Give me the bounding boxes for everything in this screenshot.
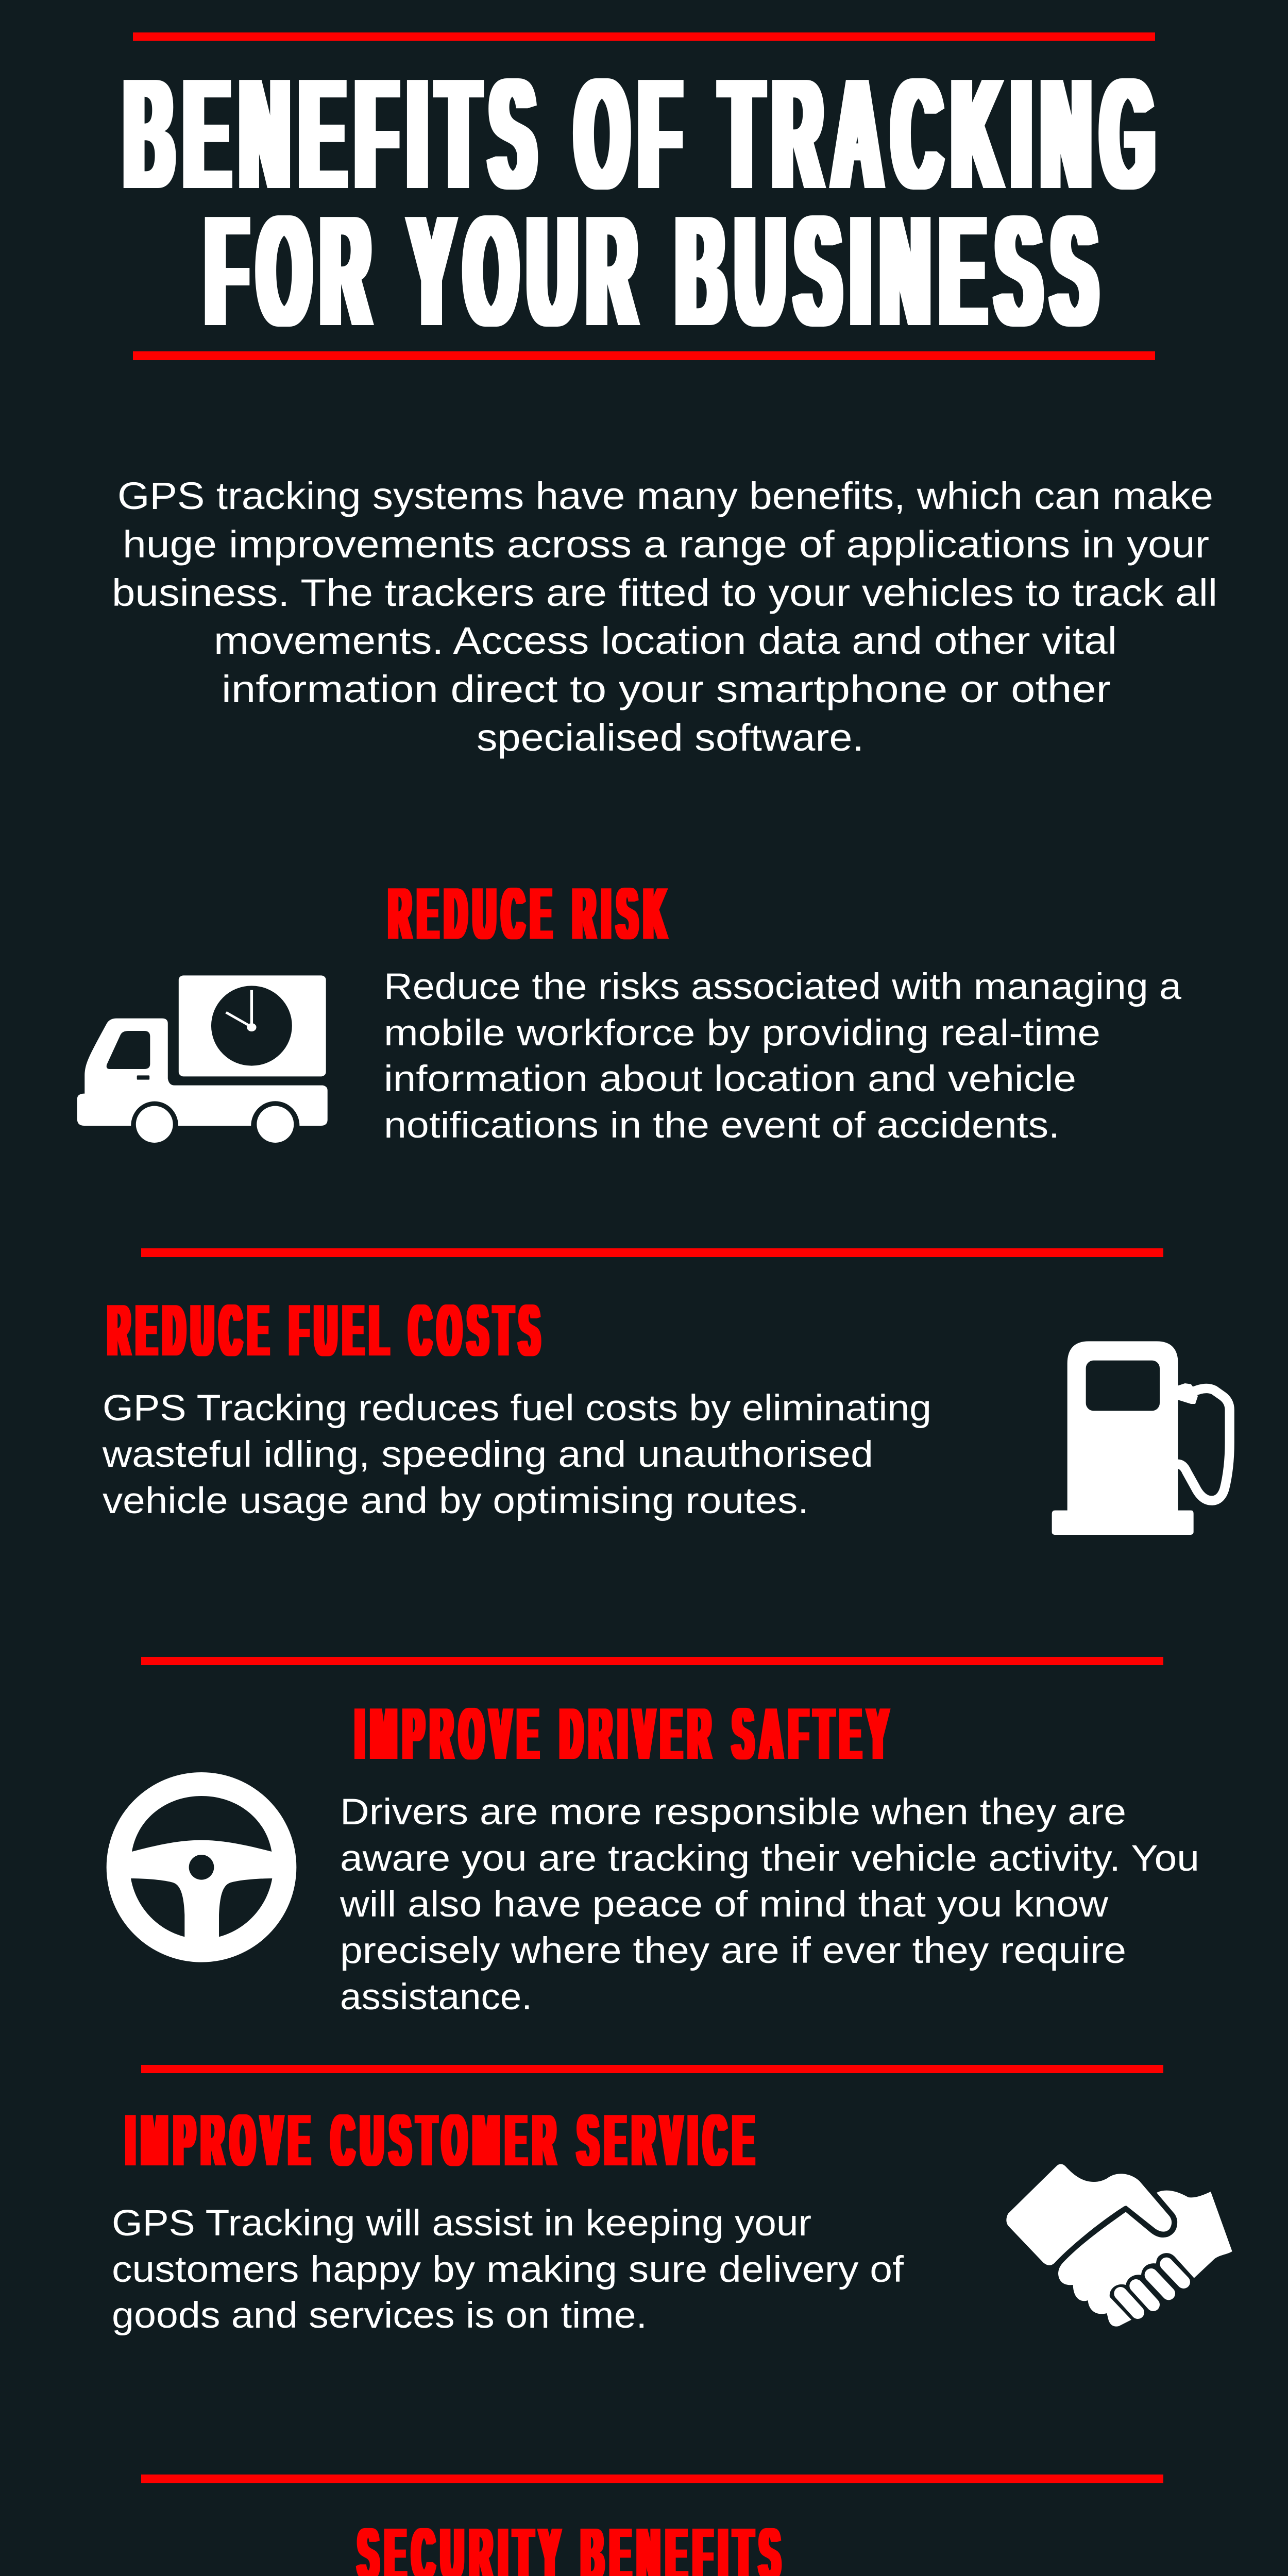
icon: steering wheel — [107, 1772, 296, 1962]
intro paragraph: huge improvements across a range of applications in your — [123, 523, 1209, 566]
body text: improve driver saftey: aware you are tracking their vehicle activity. You — [340, 1838, 1199, 1879]
body text: reduce fuel costs: GPS Tracking reduces fuel costs by eliminating — [103, 1388, 931, 1429]
body text: reduce fuel costs: wasteful idling, speeding and unauthorised — [102, 1434, 873, 1475]
panel: reduce fuel costs: REDUCE FUEL COSTS — [108, 1290, 546, 1371]
body text: improve customer service — [112, 2203, 904, 2336]
title block — [125, 32, 1165, 360]
body text: reduce risk: Reduce the risks associated with managing a — [384, 967, 1182, 1007]
body text: improve customer service: goods and services is on time. — [112, 2295, 647, 2336]
intro paragraph: business. The trackers are fitted to your vehicles to track all — [112, 571, 1217, 614]
panel: reduce risk — [77, 873, 1182, 1146]
body text: reduce fuel costs: vehicle usage and by optimising routes. — [103, 1481, 809, 1521]
icon: handshake — [1006, 2164, 1232, 2327]
icon: truck with clock — [77, 975, 328, 1143]
body text: reduce fuel costs — [102, 1388, 931, 1521]
panel: reduce risk: REDUCE RISK — [389, 873, 673, 955]
intro paragraph: information direct to your smartphone or other — [222, 668, 1111, 710]
body text: reduce risk — [384, 967, 1182, 1146]
intro paragraph: GPS tracking systems have many benefits, which can make — [117, 474, 1213, 517]
body text: improve driver saftey: assistance. — [340, 1977, 532, 2018]
icon: fuel pump — [1052, 1341, 1230, 1535]
panel: reduce fuel costs — [102, 1290, 1230, 1535]
body text: reduce risk: information about location and vehicle — [384, 1059, 1076, 1099]
body text: reduce risk: mobile workforce by providing real-time — [384, 1013, 1100, 1054]
intro paragraph — [112, 474, 1217, 759]
body text: reduce risk: notifications in the event of accidents. — [384, 1105, 1060, 1146]
body text: improve driver saftey: will also have peace of mind that you know — [340, 1884, 1109, 1925]
body text: improve driver saftey — [340, 1792, 1199, 2018]
body text: improve customer service: GPS Tracking will assist in keeping your — [112, 2203, 811, 2244]
intro paragraph: movements. Access location data and other vital — [214, 619, 1117, 662]
body text: improve driver saftey: precisely where they are if ever they require — [340, 1930, 1126, 1971]
intro paragraph: specialised software. — [477, 716, 864, 759]
panel: improve driver safety — [107, 1693, 1199, 2018]
panel: improve customer service — [112, 2099, 1232, 2336]
body text: improve customer service: customers happy by making sure delivery of — [112, 2249, 904, 2290]
body text: improve driver saftey: Drivers are more responsible when they are — [340, 1792, 1126, 1833]
title text — [125, 46, 1165, 359]
